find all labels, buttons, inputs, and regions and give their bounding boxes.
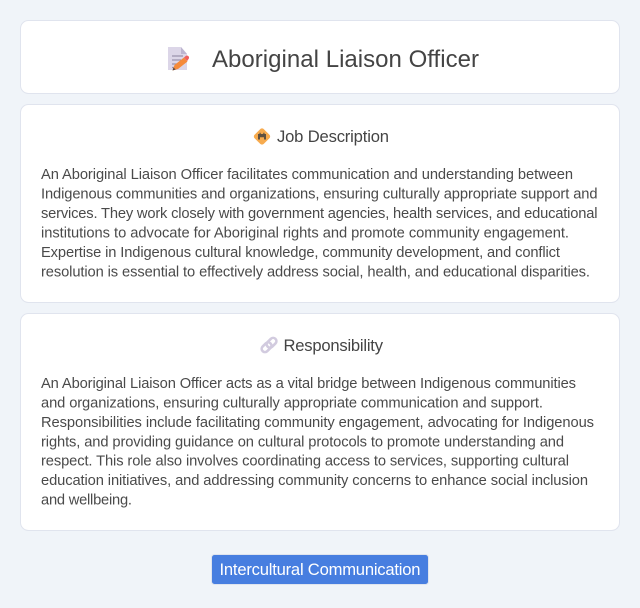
title: Aboriginal Liaison Officer — [212, 46, 479, 73]
text block: responsibility — [41, 376, 594, 508]
text block: job description — [41, 167, 598, 280]
text block: job description: Indigenous communities and organizations, ensuring culturally appropriate support and — [41, 186, 598, 202]
heading: responsibility: Responsibility — [284, 336, 384, 355]
text block: responsibility: and organizations, ensuring culturally appropriate communication and support. — [41, 396, 543, 412]
panel: title header — [20, 20, 620, 94]
text block: job description: services. They work closely with government agencies, health services, and educational — [41, 206, 598, 222]
icon: diamond road sign — [253, 127, 271, 146]
text block: responsibility: and wellbeing. — [41, 492, 132, 508]
icon: document with pencil — [168, 47, 189, 70]
text block: responsibility: An Aboriginal Liaison Officer acts as a vital bridge between Indigenous communities — [41, 376, 576, 392]
icon: chain link — [260, 337, 278, 353]
text block: job description: institutions to advocate for Aboriginal rights and promote community engagement. — [41, 226, 569, 242]
panel: job description — [20, 104, 620, 302]
text block: job description: Expertise in Indigenous cultural knowledge, community development, and conflict — [41, 245, 560, 261]
text block: responsibility: rights, and providing guidance on cultural protocols to promote understanding and — [41, 434, 564, 450]
panel: responsibility — [20, 314, 620, 530]
tag button: intercultural communication: Intercultural Communication — [220, 560, 420, 579]
tag button: intercultural communication — [212, 554, 428, 584]
text block: responsibility: respect. This role also involves coordinating access to services, supporting cultural — [41, 454, 569, 470]
text block: job description: resolution is essential to effectively address social, health, and educational disparities. — [41, 264, 590, 280]
heading: job description: Job Description — [277, 127, 389, 146]
text block: responsibility: education initiatives, and addressing community concerns to enhance social inclusion — [41, 473, 588, 489]
text block: responsibility: Responsibilities include facilitating community engagement, advocating for Indigenous — [41, 415, 594, 431]
text block: job description: An Aboriginal Liaison Officer facilitates communication and understanding between — [41, 167, 573, 183]
